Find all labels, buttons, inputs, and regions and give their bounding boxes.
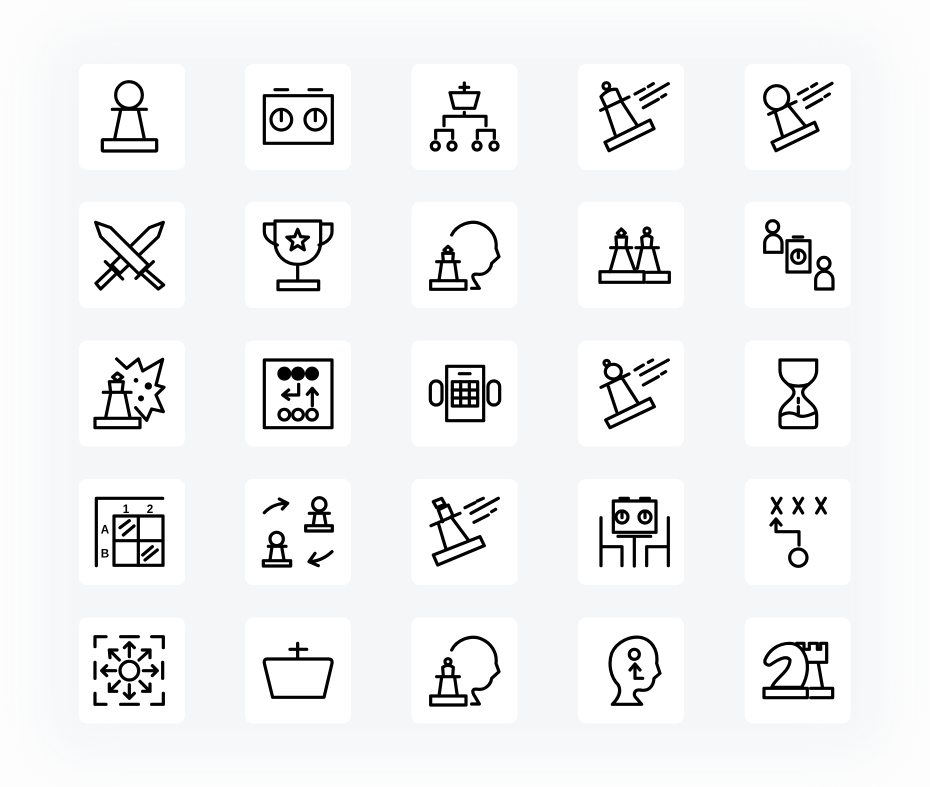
icon: table with clock [601, 498, 668, 566]
icon: two queens [600, 228, 669, 282]
icon: head with queen [431, 222, 499, 289]
icon: knight and rook [764, 643, 833, 698]
icon: head with strategy arrow [610, 637, 660, 704]
icon: score table: B [101, 548, 109, 561]
icon: score table: 2 [147, 503, 154, 516]
icon: strategy board [264, 360, 332, 428]
icon: game plan [771, 498, 825, 566]
icon: pawn exchange [263, 498, 332, 566]
icon: pawn [102, 82, 157, 151]
icon: moving pawn [765, 83, 832, 151]
icon: head with round queen [431, 637, 499, 705]
icon: tournament hierarchy [431, 83, 498, 150]
icon: score table: 1 [123, 503, 130, 516]
icon: queen with explosion [95, 359, 164, 428]
icon: crown [264, 643, 332, 697]
icon: chess clock [264, 90, 332, 143]
icon: focus arrows [95, 637, 163, 704]
icon: trophy [264, 221, 332, 290]
icon: moving queen low [431, 498, 498, 565]
icon: moving queen [601, 83, 668, 151]
icon: hourglass [780, 360, 817, 428]
icon: players and clock [765, 221, 833, 289]
icon: score table [96, 498, 163, 566]
icon: digital clock device [430, 366, 500, 421]
icon: crossed swords [96, 222, 164, 289]
icon: moving round queen [601, 360, 668, 428]
icon: score table: A [101, 523, 110, 536]
